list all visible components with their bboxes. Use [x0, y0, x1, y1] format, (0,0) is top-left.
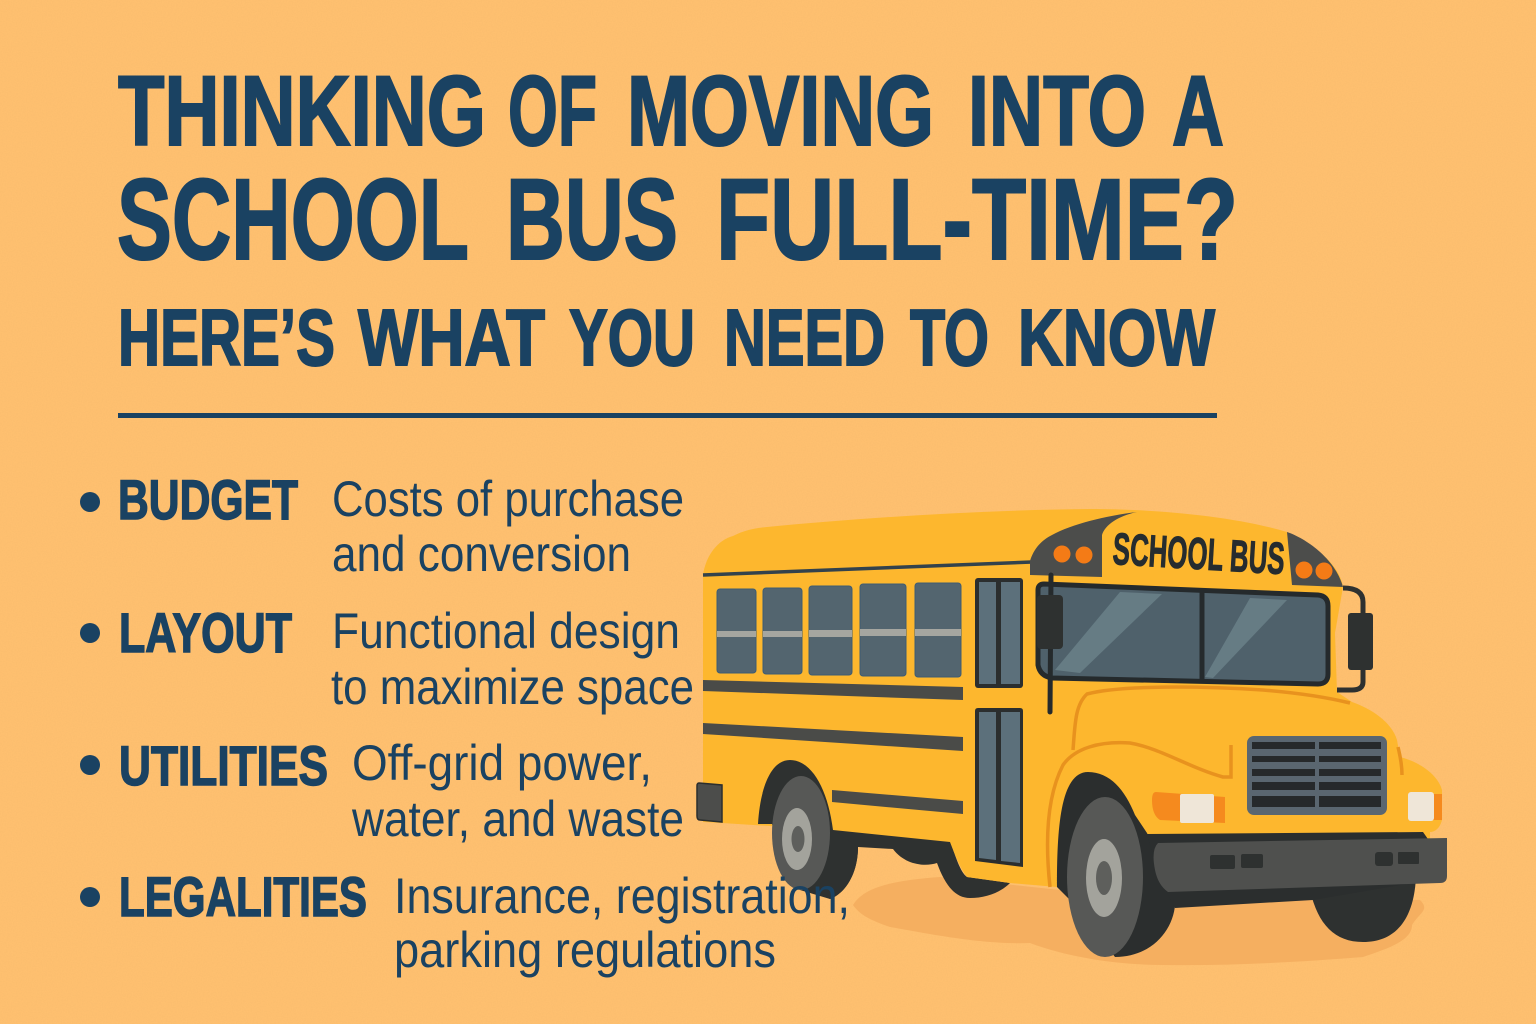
- title line 1: INTO: [968, 55, 1146, 166]
- title line 1: OF: [508, 55, 597, 166]
- bullet: [80, 887, 100, 907]
- label: BUDGET: [118, 468, 298, 531]
- subtitle: [118, 293, 1215, 382]
- ground shadow: [853, 877, 1424, 965]
- right mirror: [1337, 588, 1373, 690]
- subtitle: TO: [910, 293, 989, 382]
- school bus illustration: [697, 509, 1447, 957]
- list item: budget: [80, 468, 684, 582]
- list item: layout: [80, 601, 694, 715]
- description: Insurance, registration,: [394, 868, 850, 924]
- label: LEGALITIES: [119, 865, 367, 928]
- subtitle: WHAT: [358, 293, 545, 382]
- front wheel: [1057, 772, 1175, 957]
- title line 2: SCHOOL: [117, 156, 469, 284]
- list item: utilities: water, and waste: [351, 791, 684, 847]
- bullet: [80, 492, 100, 512]
- grille: [1247, 736, 1387, 815]
- list item: legalities: parking regulations: [394, 922, 776, 978]
- left mirror: [1037, 575, 1063, 712]
- side windows: [717, 583, 961, 677]
- subtitle: KNOW: [1018, 293, 1215, 382]
- roof line: [703, 562, 1032, 575]
- bullet: [80, 623, 100, 643]
- description: Costs of purchase: [332, 471, 684, 527]
- title line 2: [117, 156, 1238, 284]
- subtitle: HERE’S: [118, 293, 335, 382]
- left headlight: [1152, 792, 1225, 823]
- label: LAYOUT: [119, 601, 292, 664]
- roof cap left: [1030, 512, 1137, 577]
- list item: layout: to maximize space: [331, 659, 694, 715]
- rear wheel: [758, 760, 858, 899]
- body stripes: [703, 680, 963, 814]
- upper door: [975, 578, 1023, 688]
- roof cap right: [1287, 532, 1343, 587]
- subtitle: NEED: [724, 293, 885, 382]
- bus far front wheel: [1310, 875, 1416, 942]
- front bumper: [1147, 832, 1447, 908]
- title line 2: FULL-TIME?: [716, 156, 1238, 284]
- title line 1: MOVING: [627, 55, 934, 166]
- title line 1: [118, 55, 1224, 166]
- title line 1: THINKING: [118, 55, 486, 166]
- bus underside: [800, 828, 1010, 899]
- hood trim lines: [1048, 687, 1402, 887]
- description: Functional design: [332, 603, 680, 659]
- list item: budget: and conversion: [332, 526, 631, 582]
- lower door: [975, 708, 1023, 867]
- subtitle: YOU: [569, 293, 695, 382]
- description: Off-grid power,: [352, 735, 652, 791]
- bus body: [703, 509, 1442, 887]
- window sash bars: [717, 629, 961, 637]
- title: [117, 55, 1238, 382]
- list item: legalities: [80, 865, 850, 978]
- bullet: [80, 755, 100, 775]
- school bus sign: SCHOOL BUS: [1111, 523, 1286, 584]
- bus rear bumper: [697, 783, 722, 822]
- title line 1: A: [1172, 55, 1224, 166]
- list item: utilities: [80, 734, 684, 847]
- marker lights: [1054, 546, 1332, 580]
- title line 2: BUS: [506, 156, 678, 284]
- windshield: [1038, 584, 1328, 684]
- right headlight: [1408, 792, 1442, 821]
- label: UTILITIES: [119, 734, 328, 797]
